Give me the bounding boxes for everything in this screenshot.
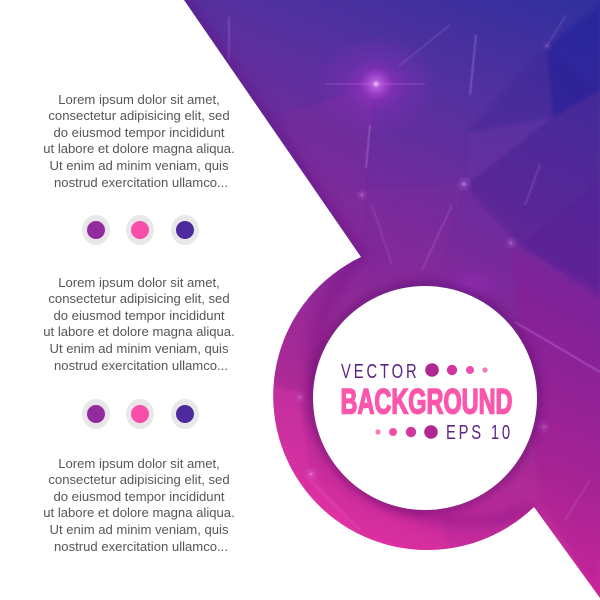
inner circle shadow (311, 284, 539, 512)
white centre circle (313, 286, 537, 510)
big glow (330, 44, 424, 123)
text block 2: do eiusmod tempor incididunt (53, 308, 225, 323)
button: violet (171, 399, 199, 429)
glow points (293, 40, 553, 483)
text block 3: ut labore et dolore magna aliqua. (43, 505, 235, 520)
button row 2 (82, 399, 199, 429)
text block 3: nostrud exercitation ullamco... (54, 539, 228, 554)
text: VECTOR: VECTOR (341, 360, 420, 383)
panel: purple polygon background with ring (184, 0, 600, 598)
text block 1: do eiusmod tempor incididunt (53, 125, 225, 140)
text block 3: Lorem ipsum dolor sit amet, (58, 456, 220, 471)
dots: top row (425, 363, 488, 377)
text block 2: ut labore et dolore magna aliqua. (43, 324, 235, 339)
text block 2: Lorem ipsum dolor sit amet, (58, 275, 220, 290)
text block 2: Ut enim ad minim veniam, quis (49, 341, 229, 356)
text: BACKGROUND: BACKGROUND (340, 382, 512, 422)
text block 3 (43, 456, 235, 554)
text block 3: Ut enim ad minim veniam, quis (49, 522, 229, 537)
button: pink (126, 399, 154, 429)
text block 1 (43, 92, 235, 190)
text block 2: nostrud exercitation ullamco... (54, 358, 228, 373)
text block 1: Ut enim ad minim veniam, quis (49, 158, 229, 173)
light streaks (229, 15, 600, 530)
text block 1: Lorem ipsum dolor sit amet, (58, 92, 220, 107)
button: purple (82, 215, 110, 245)
faceted polygons (272, 5, 600, 600)
text block 1: ut labore et dolore magna aliqua. (43, 141, 235, 156)
button: purple (82, 399, 110, 429)
text block 2: consectetur adipisicing elit, sed (48, 291, 230, 306)
text block 2 (43, 275, 235, 373)
text block 3: do eiusmod tempor incididunt (53, 489, 225, 504)
dark edge shadows (184, 0, 534, 522)
text: EPS 10: EPS 10 (446, 421, 513, 444)
dots: bottom row (375, 425, 438, 439)
button: pink (126, 215, 154, 245)
button row 1 (82, 215, 199, 245)
text block 1: nostrud exercitation ullamco... (54, 175, 228, 190)
text block 1: consectetur adipisicing elit, sed (48, 108, 230, 123)
heading: vector background eps 10 (340, 360, 513, 444)
text block 3: consectetur adipisicing elit, sed (48, 472, 230, 487)
button: violet (171, 215, 199, 245)
